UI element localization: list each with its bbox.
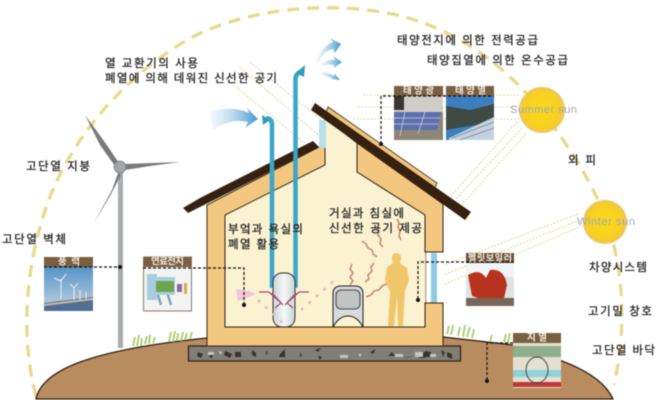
summer sun: Summer sun xyxy=(510,104,577,116)
label: fresh air supply: 신선한 공기 제공 xyxy=(329,222,422,235)
label: shading system: 차양시스템 xyxy=(589,261,647,274)
leader dots xyxy=(118,142,489,383)
diagram panel: fuel cell: 연료전지 xyxy=(151,256,184,268)
window xyxy=(425,204,444,345)
label: waste heat use: 폐열 활용 xyxy=(228,237,279,251)
label: insulated roof: 고단열 지붕 xyxy=(26,160,90,173)
grass xyxy=(133,325,510,346)
label: heat exchanger use: 열 교환기의 사용 xyxy=(105,57,198,70)
label: kitchen and bathroom: 부엌과 욕실의 xyxy=(228,223,303,236)
solar rays xyxy=(225,62,582,288)
label: insulated floor: 고단열 바닥 xyxy=(592,344,655,357)
diagram panel: geothermal: 지 열 xyxy=(527,332,547,344)
radiator xyxy=(333,286,363,327)
label: solar cell power supply: 태양전지에 의한 전력공급 xyxy=(397,34,538,47)
label: airtight windows: 고기밀 창호 xyxy=(588,305,652,318)
photo panel: pellet boiler xyxy=(466,252,514,306)
photo panel: solar PV xyxy=(394,84,443,140)
house body xyxy=(207,143,443,346)
winter sun xyxy=(577,200,635,244)
diagram panel: geothermal xyxy=(513,332,561,388)
winter sun: Winter sun xyxy=(577,216,635,228)
label: envelope: 외 피 xyxy=(568,154,596,167)
diagram panel: fuel cell xyxy=(144,256,192,311)
wind turbine xyxy=(85,115,180,348)
photo panel: solar thermal xyxy=(446,84,494,140)
person silhouette xyxy=(385,253,409,326)
label: solar heat hot water supply: 태양집열에 의한 온수공급 xyxy=(427,54,568,67)
photo panel: solar thermal: 태양열 xyxy=(455,84,486,96)
left roof xyxy=(183,141,319,213)
foundation xyxy=(188,346,460,361)
summer sun xyxy=(510,87,577,133)
photo panel: pellet boiler: 펠릿보일러 xyxy=(468,252,512,263)
photo panel: wind power: 풍 력 xyxy=(58,256,80,268)
pipe arrowheads xyxy=(262,65,305,125)
photo panel: wind power xyxy=(44,256,93,311)
warm air squiggles xyxy=(350,219,401,297)
hot water tank xyxy=(236,273,309,327)
ground xyxy=(36,337,613,399)
blue air flow arrows xyxy=(210,38,342,130)
ventilation pipes xyxy=(266,71,303,288)
right roof xyxy=(311,103,471,220)
dashed leader lines xyxy=(44,96,514,381)
solar panel strip and skylight xyxy=(319,107,437,188)
label: fresh air warmed by waste heat: 폐열에 의해 데워진 신선한 공기 xyxy=(105,72,277,85)
house interior xyxy=(225,118,426,327)
label: living room and bedroom: 거실과 침실에 xyxy=(329,207,404,220)
photo panel: solar PV: 태양광 xyxy=(403,84,434,96)
warm air dots xyxy=(258,280,335,325)
label: insulated wall: 고단열 벽체 xyxy=(2,233,66,246)
